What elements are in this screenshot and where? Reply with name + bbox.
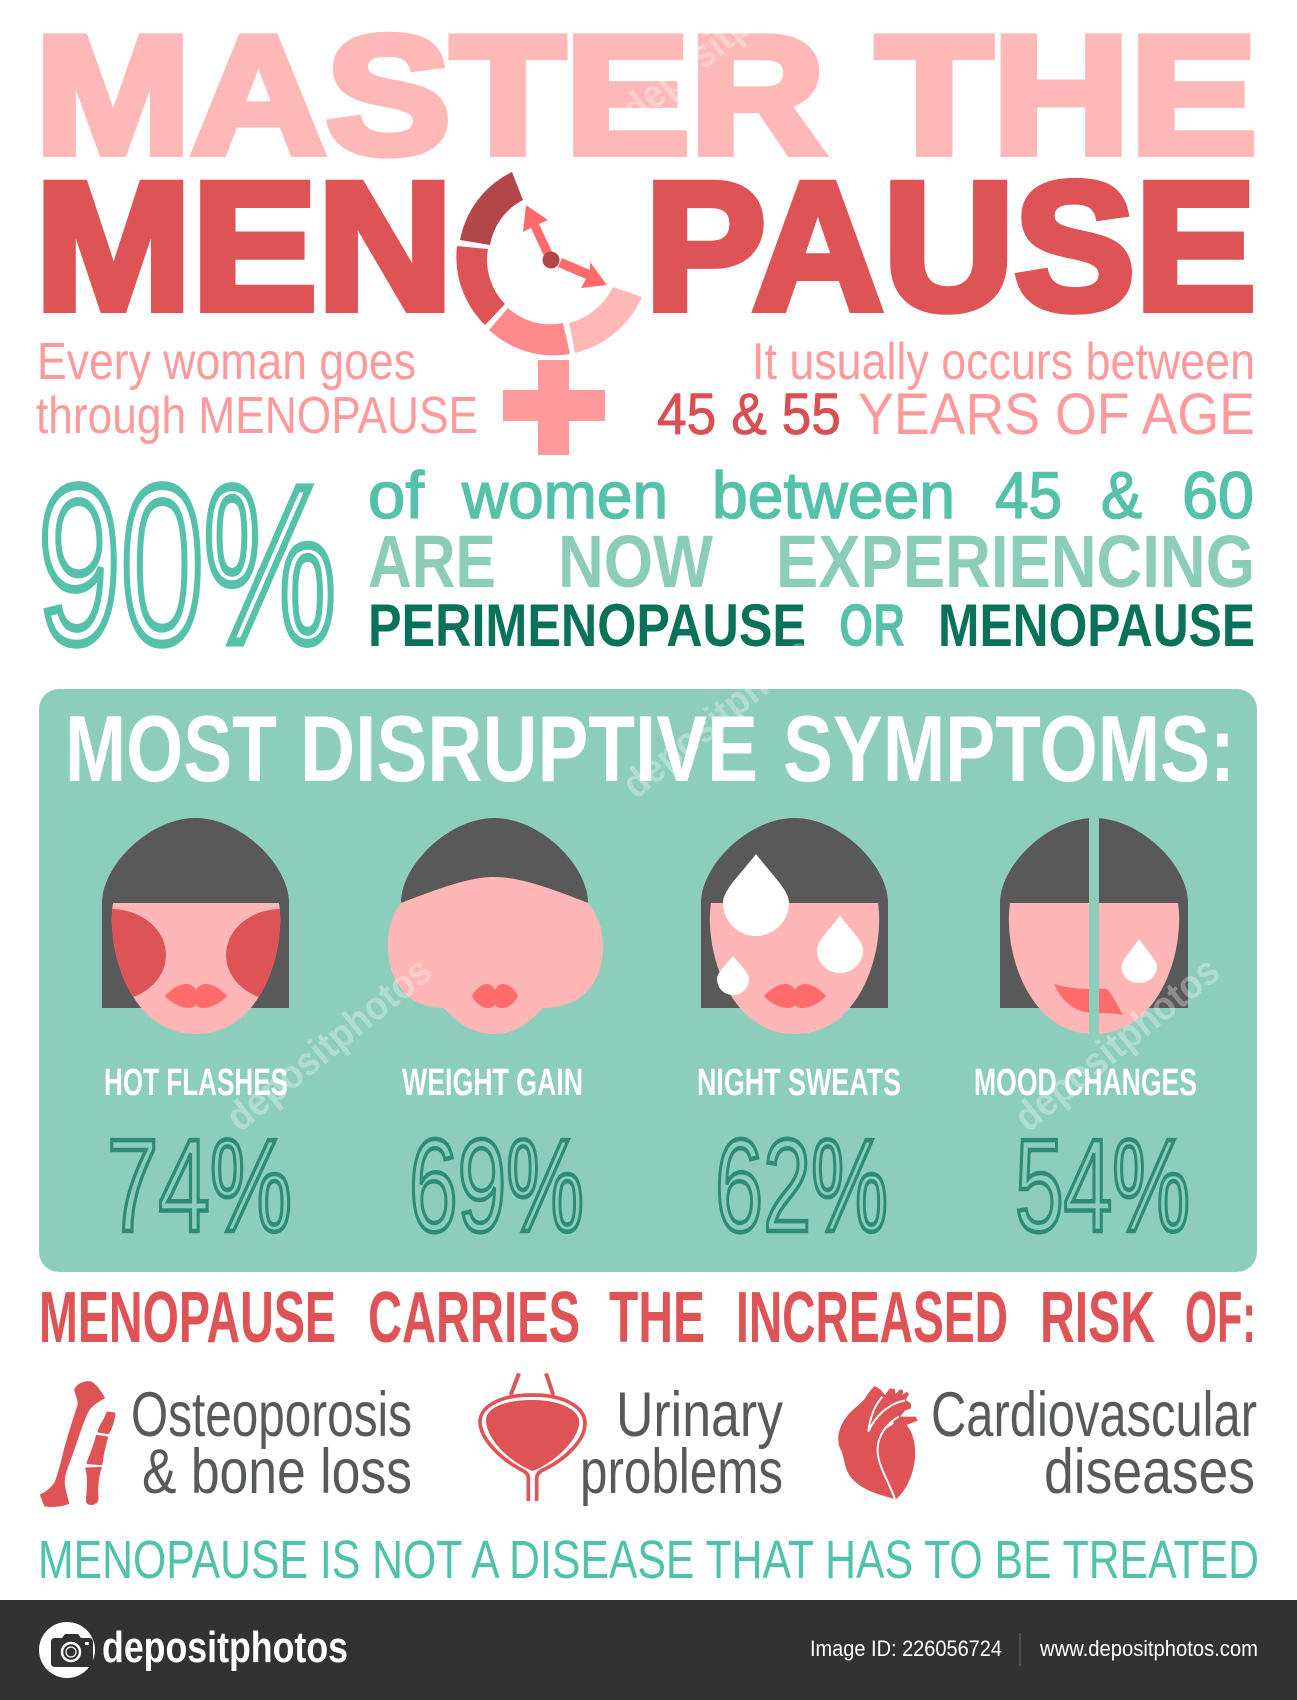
logo: camera badge bbox=[39, 1622, 95, 1678]
ring segment: red bbox=[456, 246, 505, 325]
heading: increased risk: CARRIES bbox=[368, 1278, 580, 1358]
symptom labels: MOOD CHANGES bbox=[974, 1062, 1197, 1104]
watermarks: depositphotos bbox=[218, 948, 440, 1140]
symptom percentages bbox=[107, 1112, 1190, 1259]
text: cardiovascular diseases bbox=[931, 1380, 1257, 1507]
text: osteoporosis and bone loss: Osteoporosis bbox=[131, 1380, 412, 1450]
line: of women between 45 and 60: between bbox=[712, 458, 955, 532]
clock hand: up-left bbox=[523, 205, 553, 258]
ring segment: salmon bbox=[489, 308, 570, 355]
watermarks: depositphotos bbox=[614, 615, 836, 807]
title line: MENOPAUSE: MEN bbox=[35, 144, 453, 348]
heading: increased risk: RISK bbox=[1040, 1278, 1155, 1358]
text: urinary problems: Urinary bbox=[616, 1380, 783, 1450]
intro text right bbox=[657, 333, 1255, 447]
panel heading bbox=[65, 696, 1235, 801]
clock hub bbox=[542, 252, 560, 268]
clock hand: right bbox=[558, 258, 607, 288]
symptom labels: HOT FLASHES bbox=[104, 1062, 288, 1104]
intro text right: YEARS OF AGE bbox=[858, 382, 1255, 447]
line: of women between 45 and 60: & bbox=[1101, 458, 1142, 532]
watermarks: depositphotos bbox=[1006, 948, 1228, 1140]
face: hot flashes bbox=[102, 818, 289, 1034]
symptom percentages: 69% bbox=[409, 1112, 584, 1259]
line: of women between 45 and 60: 60 bbox=[1182, 458, 1254, 532]
panel heading: MOST bbox=[65, 696, 277, 801]
intro text left: through MENOPAUSE bbox=[36, 387, 478, 445]
title line: MENOPAUSE bbox=[35, 144, 1256, 348]
ring segment: pale bbox=[569, 287, 642, 353]
heading: increased risk bbox=[39, 1278, 1256, 1358]
symptom percentages: 62% bbox=[715, 1112, 888, 1259]
symptom labels: NIGHT SWEATS bbox=[697, 1062, 901, 1104]
image id: Image ID: 226056724 bbox=[810, 1636, 1002, 1661]
intro text left bbox=[36, 333, 478, 445]
symptom percentages: 54% bbox=[1015, 1112, 1190, 1259]
text: osteoporosis and bone loss bbox=[131, 1380, 412, 1507]
ring segment: dark bbox=[460, 172, 523, 245]
text: osteoporosis and bone loss: & bone loss bbox=[142, 1437, 412, 1507]
text: urinary problems bbox=[580, 1380, 783, 1507]
intro text right: 45 & 55 bbox=[657, 382, 841, 447]
symptom labels bbox=[104, 1062, 1197, 1104]
line: are now experiencing: ARE bbox=[368, 520, 496, 603]
symptom percentages: 74% bbox=[107, 1112, 292, 1259]
line: perimenopause or menopause: OR bbox=[839, 592, 905, 659]
panel background bbox=[39, 689, 1257, 1272]
logo wordmark: depositphotos bbox=[102, 1623, 348, 1672]
line: of women between 45 and 60: of bbox=[368, 458, 425, 532]
line: are now experiencing: NOW bbox=[558, 520, 713, 603]
watermarks bbox=[218, 0, 1228, 1140]
icon: bone bbox=[41, 1382, 115, 1506]
icon: bladder bbox=[480, 1373, 585, 1501]
icon: heart bbox=[838, 1386, 918, 1499]
title: Master the Menopause bbox=[35, 1, 1257, 348]
heading: increased risk: MENOPAUSE bbox=[39, 1278, 336, 1358]
text: urinary problems: problems bbox=[580, 1437, 783, 1507]
line: perimenopause or menopause bbox=[368, 592, 1255, 659]
line: of women between 45 and 60: 45 bbox=[995, 458, 1062, 532]
heading: increased risk: THE bbox=[609, 1278, 705, 1358]
website: www.depositphotos.com bbox=[1039, 1636, 1258, 1661]
footer bar bbox=[0, 1600, 1297, 1700]
panel: most disruptive symptoms bbox=[39, 689, 1257, 1272]
icon: female symbol with clock bbox=[456, 172, 642, 455]
statistic: 90%: 90% bbox=[38, 440, 336, 690]
statistic description bbox=[368, 458, 1255, 659]
text: cardiovascular diseases: diseases bbox=[1044, 1437, 1255, 1507]
cross of the female symbol bbox=[503, 360, 605, 455]
title line: MASTER THE: THE bbox=[876, 1, 1257, 189]
line: perimenopause or menopause: PERIMENOPAUSE bbox=[368, 592, 806, 659]
title line: MASTER THE bbox=[35, 1, 1257, 189]
face: night sweats bbox=[701, 818, 888, 1034]
panel heading: DISRUPTIVE bbox=[300, 696, 758, 801]
heading: increased risk: INCREASED bbox=[736, 1278, 1008, 1358]
intro text left: Every woman goes bbox=[37, 333, 416, 391]
title line: MENOPAUSE: PAUSE bbox=[645, 144, 1256, 348]
face: mood changes bbox=[1000, 815, 1188, 1037]
line: of women between 45 and 60: women bbox=[461, 458, 668, 532]
line: of women between 45 and 60 bbox=[368, 458, 1254, 532]
face: weight gain bbox=[388, 818, 603, 1034]
symptom labels: WEIGHT GAIN bbox=[402, 1062, 583, 1104]
line: are now experiencing bbox=[368, 520, 1255, 603]
title line: MASTER THE: MASTER bbox=[35, 1, 825, 189]
